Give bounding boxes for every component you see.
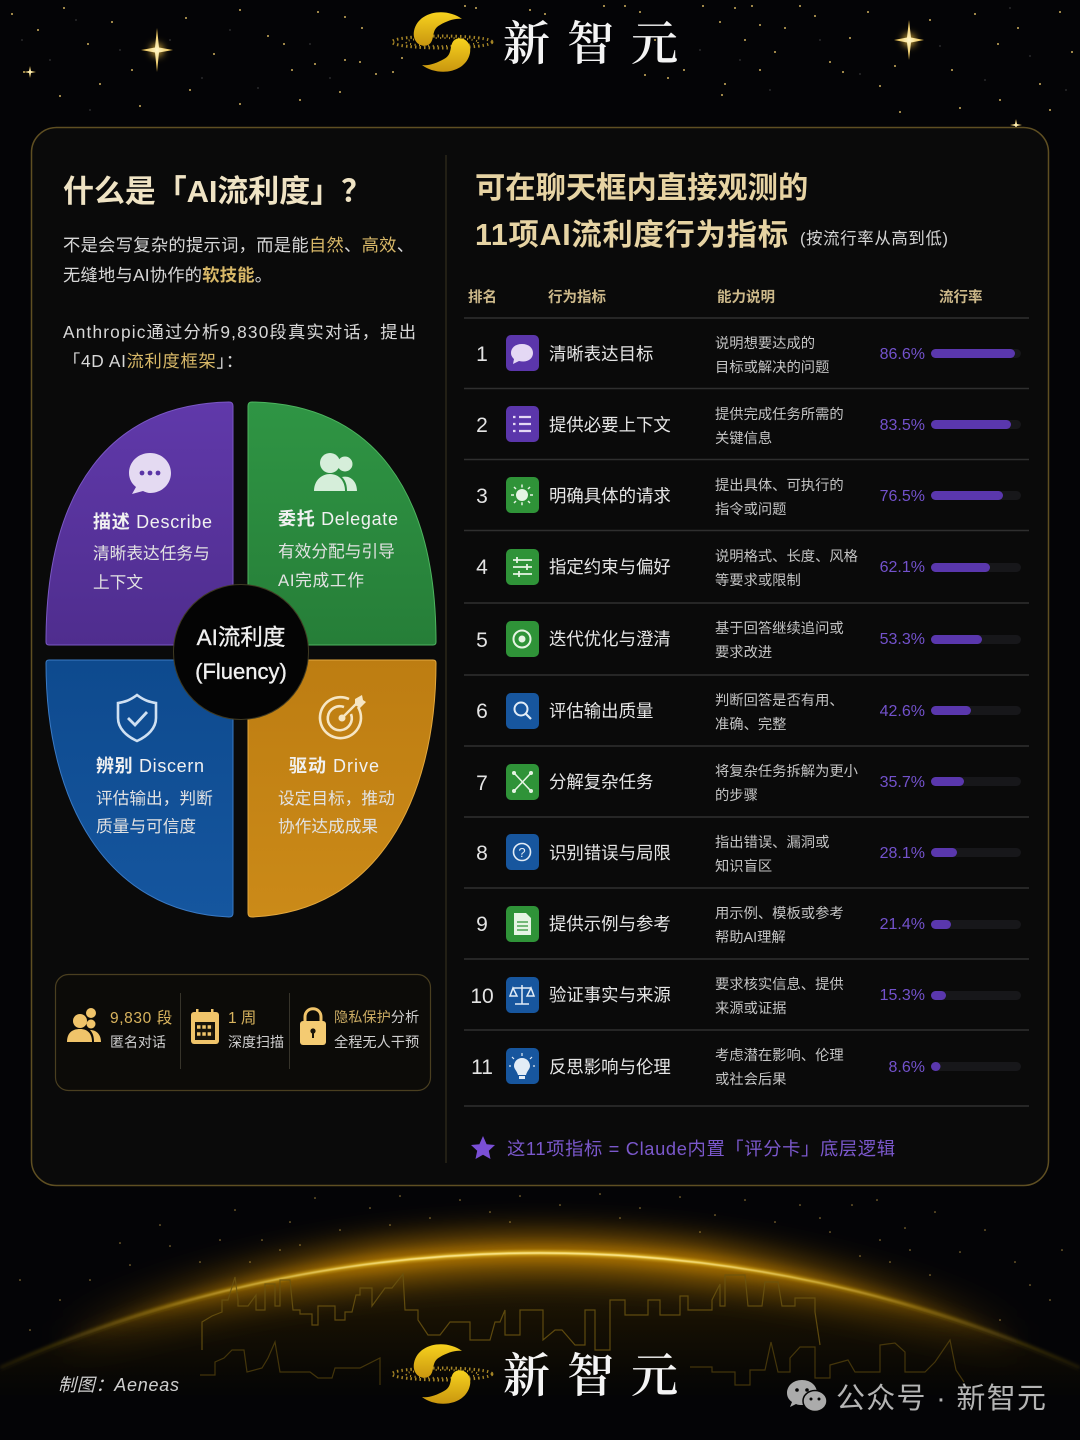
quadrant: describe: 上下文	[93, 573, 143, 592]
icon: purple star	[471, 1136, 495, 1159]
starfield: bottom	[20, 1194, 1062, 1330]
icon: target	[320, 695, 366, 738]
footnote: 这11项指标 = Claude内置「评分卡」底层逻辑	[507, 1138, 895, 1159]
row 6	[476, 692, 1021, 733]
skyline	[200, 1274, 964, 1385]
row 2	[476, 406, 1021, 447]
row 2: 83.5%	[880, 417, 925, 434]
icon: people	[314, 453, 357, 491]
stat: privacy	[300, 1009, 419, 1051]
icon: search	[506, 693, 539, 729]
row 10: 来源或证据	[715, 1000, 786, 1017]
icon: sun	[506, 477, 539, 513]
icon: small sparkle left	[24, 66, 36, 78]
icon: shield	[118, 695, 156, 741]
icon: small sparkle on panel corner	[1010, 119, 1022, 131]
icon: sliders	[506, 549, 539, 585]
icon: question	[506, 834, 539, 870]
quadrant: discern: 辨别 Discern	[96, 756, 204, 776]
quadrant: describe: 描述 Describe	[93, 512, 212, 532]
quadrant: describe: 清晰表达任务与	[93, 544, 210, 563]
row 4: 说明格式、长度、风格	[715, 548, 858, 565]
quadrant: drive: 驱动 Drive	[289, 756, 379, 776]
row 8: 指出错误、漏洞或	[715, 834, 829, 851]
row 7: 分解复杂任务	[549, 772, 653, 792]
row 4: 4	[476, 556, 488, 579]
quadrant: discern: 质量与可信度	[96, 817, 196, 836]
logo: bottom: 新智元	[503, 1339, 695, 1406]
icon: wechat	[787, 1380, 827, 1412]
row 8	[476, 834, 1021, 875]
row 7: 的步骤	[715, 787, 758, 804]
icon: speech bubble	[129, 453, 171, 494]
row 5: 53.3%	[880, 631, 925, 648]
row 10: 验证事实与来源	[549, 985, 671, 1005]
4D framework diagram	[46, 402, 436, 917]
table header: 流行率	[939, 288, 982, 306]
icon: focus ring	[506, 621, 539, 657]
icon: chat	[506, 335, 539, 371]
row 1: 目标或解决的问题	[715, 359, 829, 376]
quadrant: discern: 评估输出，判断	[96, 789, 213, 808]
row 7	[476, 762, 1021, 804]
table header	[468, 288, 982, 306]
quadrant: discern	[46, 660, 233, 917]
icon: sparkle star left	[141, 28, 173, 72]
main panel	[32, 128, 1048, 1186]
row 9: 21.4%	[880, 916, 925, 933]
row 1: 清晰表达目标	[549, 344, 653, 364]
stat: conversations	[67, 1008, 173, 1050]
row 3: 指令或问题	[715, 501, 786, 518]
quadrant: drive	[248, 660, 436, 917]
row 3: 3	[476, 485, 488, 508]
horizon glow arc	[0, 1253, 1080, 1395]
intro text block: 不是会写复杂的提示词，而是能自然、高效、	[63, 235, 414, 255]
stat: conversations: 匿名对话	[110, 1034, 166, 1050]
row 4	[476, 548, 1021, 589]
icon: lock	[300, 1009, 326, 1045]
stat: one week: 1 周	[228, 1010, 256, 1027]
row 1: 1	[476, 343, 488, 366]
row 4: 指定约束与偏好	[549, 557, 671, 577]
credit: 制图：Aeneas	[58, 1375, 179, 1395]
row 1: 86.6%	[880, 346, 925, 363]
icon: people gold	[67, 1008, 101, 1042]
right heading: 11项AI流利度行为指标	[475, 218, 788, 252]
starfield: top	[12, 6, 1072, 112]
row 11	[471, 1047, 1021, 1088]
row 2: 提供完成任务所需的	[715, 406, 844, 423]
row 1: 说明想要达成的	[715, 335, 815, 352]
stats box	[56, 974, 430, 1090]
row 11: 8.6%	[889, 1059, 925, 1076]
row 2: 2	[476, 414, 488, 437]
intro text block	[63, 235, 416, 371]
table header: 排名	[468, 288, 497, 306]
row 11: 反思影响与伦理	[549, 1057, 671, 1077]
center circle: fluency	[174, 584, 308, 720]
row 3: 76.5%	[880, 488, 925, 505]
row 8: 28.1%	[880, 845, 925, 862]
table header: 能力说明	[717, 288, 775, 306]
icon: question: ?	[518, 845, 526, 860]
quadrant: drive: 协作达成成果	[278, 817, 378, 836]
row 9: 9	[476, 913, 488, 936]
row 6: 6	[476, 700, 488, 723]
quadrant: delegate: 委托 Delegate	[278, 509, 398, 529]
quadrant: drive: 设定目标，推动	[278, 789, 395, 808]
center circle: fluency: (Fluency)	[195, 659, 287, 684]
row 10: 要求核实信息、提供	[715, 976, 844, 993]
row 11: 考虑潜在影响、伦理	[715, 1047, 844, 1064]
row 10: 10	[470, 985, 494, 1008]
right heading	[475, 171, 948, 252]
logo: bottom	[392, 1339, 695, 1406]
row 9: 用示例、模板或参考	[715, 905, 844, 922]
logo: top	[392, 7, 695, 74]
icon: lightbulb	[506, 1048, 539, 1084]
row 3: 明确具体的请求	[549, 486, 671, 506]
icon: document	[506, 906, 539, 942]
stat: privacy: 全程无人干预	[334, 1034, 419, 1051]
right heading: 可在聊天框内直接观测的	[475, 171, 808, 205]
row 3: 提出具体、可执行的	[715, 477, 844, 494]
row 6: 42.6%	[880, 703, 925, 720]
intro text block: 无缝地与AI协作的软技能。	[63, 265, 272, 285]
row 3	[476, 477, 1021, 518]
row 7: 7	[476, 772, 488, 795]
row 8: 知识盲区	[715, 858, 772, 875]
stat: one week: 深度扫描	[228, 1034, 284, 1050]
row 5: 基于回答继续追问或	[715, 620, 844, 637]
right heading: (按流行率从高到低)	[800, 230, 948, 248]
quadrant: describe	[46, 402, 233, 645]
icon: calendar	[191, 1009, 219, 1044]
row 9: 提供示例与参考	[549, 914, 671, 934]
stat: one week	[191, 1009, 284, 1050]
row 8: 识别错误与局限	[549, 843, 671, 863]
quadrant: delegate: 有效分配与引导	[278, 542, 395, 561]
intro text block: Anthropic通过分析9,830段真实对话，提出	[63, 322, 416, 342]
wechat watermark: 公众号 · 新智元	[836, 1382, 1046, 1415]
row 10	[470, 976, 1021, 1017]
row 6: 准确、完整	[715, 716, 786, 733]
quadrant: delegate	[248, 402, 436, 645]
row 9	[476, 905, 1021, 946]
row 6: 判断回答是否有用、	[715, 692, 844, 709]
left heading: 什么是「AI流利度」？	[63, 174, 372, 209]
stat: privacy: 隐私保护分析	[334, 1010, 419, 1026]
center circle: fluency: AI流利度	[197, 625, 285, 650]
icon: scales	[506, 977, 539, 1013]
logo: top: 新智元	[503, 7, 695, 74]
row 7: 35.7%	[880, 774, 925, 791]
quadrant: delegate: AI完成工作	[278, 571, 364, 590]
row 9: 帮助AI理解	[715, 929, 786, 946]
row 6: 评估输出质量	[549, 701, 653, 721]
row 5: 迭代优化与澄清	[549, 629, 671, 649]
table header: 行为指标	[548, 288, 606, 306]
row 5: 要求改进	[715, 644, 772, 661]
row 5: 5	[476, 629, 488, 652]
icon: split	[506, 764, 539, 800]
row 8: 8	[476, 842, 488, 865]
row 7: 将复杂任务拆解为更小	[715, 762, 858, 780]
row 2: 提供必要上下文	[549, 415, 671, 435]
row 11: 11	[471, 1056, 493, 1079]
panel divider	[446, 155, 447, 1163]
row 4: 62.1%	[880, 559, 925, 576]
row 11: 或社会后果	[715, 1071, 786, 1088]
icon: sparkle star right	[894, 20, 924, 60]
intro text block: 「4D AI流利度框架」：	[63, 351, 243, 371]
stat: conversations: 9,830 段	[110, 1009, 173, 1027]
row 4: 等要求或限制	[715, 571, 801, 589]
row 10: 15.3%	[880, 987, 925, 1004]
row 1	[476, 335, 1021, 376]
row 2: 关键信息	[715, 430, 772, 447]
row 5	[476, 620, 1021, 661]
icon: list	[506, 406, 539, 442]
